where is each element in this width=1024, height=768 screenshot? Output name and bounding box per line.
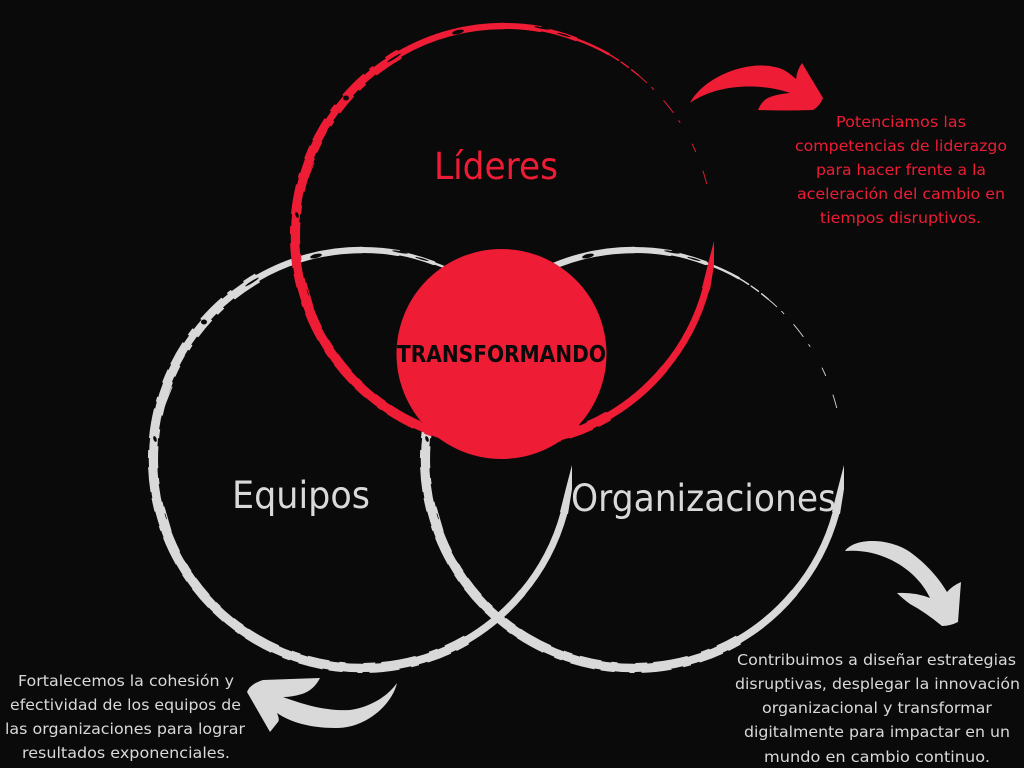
text: teams description	[5, 672, 246, 762]
heading: Organizaciones: Organizaciones	[571, 477, 836, 520]
text: teams description: resultados exponenciales.	[22, 744, 230, 762]
text: teams description: Fortalecemos la cohesión y	[18, 672, 234, 690]
text: leaders description	[795, 113, 1007, 227]
heading: Equipos: Equipos	[232, 474, 370, 517]
text: organizations description: organizacional y transformar	[762, 699, 993, 717]
text: organizations description: disruptivas, desplegar la innovación	[735, 675, 1020, 693]
text: leaders description: competencias de liderazgo	[795, 137, 1007, 155]
circle: Organizaciones	[421, 250, 844, 672]
text: leaders description: aceleración del cambio en	[797, 185, 1005, 203]
text: leaders description: Potenciamos las	[836, 113, 966, 131]
text: leaders description: tiempos disruptivos.	[820, 209, 981, 227]
center label: TRANSFORMANDO	[397, 342, 606, 368]
center disc	[396, 249, 606, 459]
text: organizations description: mundo en cambio continuo.	[764, 748, 990, 766]
text: organizations description	[735, 651, 1020, 766]
circle: Líderes	[291, 26, 714, 448]
heading: Líderes: Líderes	[434, 145, 558, 188]
arrow: red, to leaders text	[690, 63, 823, 110]
text: organizations description: digitalmente para impactar en un	[744, 723, 1010, 741]
text: teams description: efectividad de los equipos de	[10, 696, 241, 714]
circle: Equipos	[149, 250, 572, 672]
text: leaders description: para hacer frente a la	[816, 161, 986, 179]
text: organizations description: Contribuimos a diseñar estrategias	[737, 651, 1016, 669]
text: teams description: las organizaciones para lograr	[5, 720, 246, 738]
arrow: gray, to organizations text	[845, 541, 961, 626]
arrow: gray, to teams text	[247, 678, 397, 732]
